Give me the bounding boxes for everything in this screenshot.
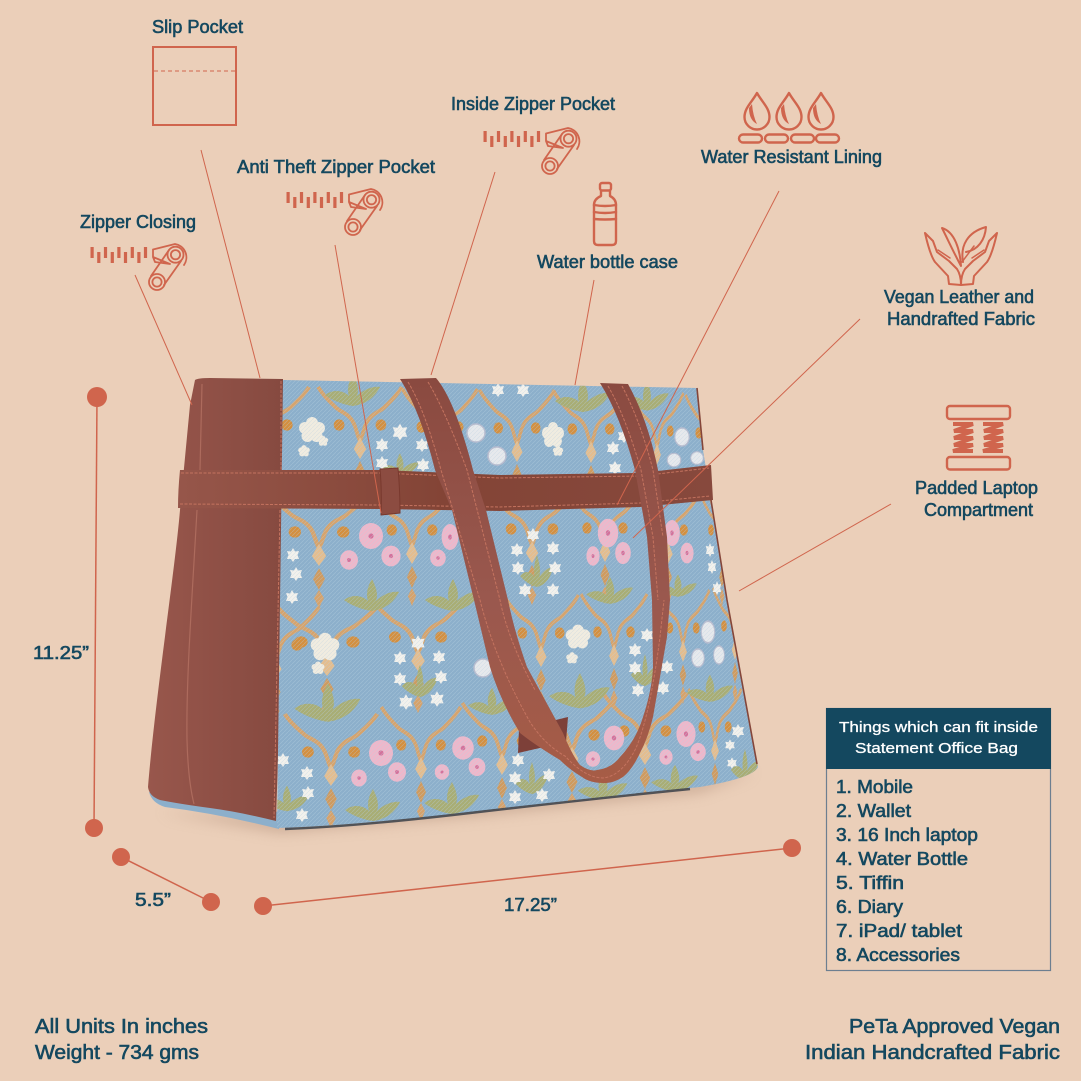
panel header: [826, 708, 1051, 769]
list of items: 2. Wallet: [836, 801, 911, 821]
panel heading: [839, 719, 1038, 757]
label: Padded Laptop Compartment: Compartment: [924, 500, 1033, 520]
belt loop: [380, 468, 400, 515]
pink flowers: [340, 519, 706, 786]
icon: water bottle: [594, 183, 616, 245]
arch rows: [221, 387, 757, 828]
label: Zipper Closing: Zipper Closing: [80, 212, 196, 232]
list of items: 5. Tiffin: [836, 873, 904, 893]
strap stitching: [408, 382, 664, 778]
footer: certification: PeTa Approved Vegan: [849, 1016, 1060, 1038]
footer: certification: Indian Handcrafted Fabric: [805, 1042, 1060, 1064]
icon: slip pocket: [153, 47, 236, 125]
shoulder strap: [400, 378, 670, 783]
product photo: tote bag: [148, 370, 770, 840]
footer: units and weight: Weight - 734 gms: [35, 1042, 199, 1064]
footer: units and weight: [35, 1016, 208, 1064]
label: Padded Laptop Compartment: [915, 478, 1038, 520]
white star flowers: [277, 383, 744, 822]
icon: inside zipper: [484, 128, 579, 174]
list of items: 7. iPad/ tablet: [836, 921, 962, 941]
label: Anti Theft Zipper Pocket: Anti Theft Zipper Pocket: [237, 157, 435, 177]
dimension label: width: 17.25”: [504, 895, 557, 915]
olive leaves: [265, 374, 758, 821]
leader lines: [135, 150, 891, 591]
label: Water bottle case: Water bottle case: [537, 252, 678, 272]
grey ring flowers: [467, 424, 724, 677]
label: Inside Zipper Pocket: Inside Zipper Pocket: [451, 94, 615, 114]
panel: things which fit inside: [826, 708, 1051, 970]
icon: anti theft zipper: [286, 189, 382, 235]
label: Vegan Leather and Handcrafted Fabric: Handrafted Fabric: [887, 309, 1035, 329]
label: Padded Laptop Compartment: Padded Laptop: [915, 478, 1038, 498]
twill texture: [270, 370, 770, 840]
label: Slip Pocket: Slip Pocket: [152, 17, 243, 37]
fabric front panel: [277, 380, 758, 828]
dimension label: depth: 5.5”: [135, 890, 171, 910]
dimension: depth: [112, 848, 220, 911]
label: Vegan Leather and Handcrafted Fabric: [884, 287, 1035, 329]
icon: water drops: [739, 93, 839, 142]
right edge trim: [697, 388, 757, 764]
bottom edge shadow: [285, 789, 690, 829]
leather patch: [518, 717, 568, 753]
side leather panel: [148, 378, 283, 821]
list of items: 1. Mobile: [836, 777, 913, 797]
dimension label: height: 11.25”: [33, 643, 89, 663]
footer: units and weight: All Units In inches: [35, 1016, 208, 1038]
floor shadow: [160, 772, 755, 832]
label: Vegan Leather and Handcrafted Fabric: Vegan Leather and: [884, 287, 1034, 307]
list of items: [836, 777, 978, 965]
bottom fabric trim of side panel: [149, 792, 279, 829]
horizontal leather belt: [178, 465, 713, 511]
panel heading: Things which can fit inside: [839, 719, 1038, 736]
panel heading: Statement Office Bag: [855, 740, 1018, 757]
list of items: 3. 16 Inch laptop: [836, 825, 978, 845]
fabric floral pattern: [221, 370, 770, 840]
side panel seams: [187, 384, 202, 804]
label: Water Resistant Lining: Water Resistant Lining: [701, 147, 882, 167]
belt stitching: [180, 468, 710, 507]
icon: padded spring: [947, 406, 1010, 470]
dimension: width: [254, 839, 801, 915]
list of items: 8. Accessories: [836, 945, 960, 965]
list of items: 4. Water Bottle: [836, 849, 968, 869]
icon: zipper closing: [90, 244, 186, 290]
footer: certification: [805, 1016, 1060, 1064]
fabric-leather stitching: [274, 381, 281, 818]
dimension: height: [85, 387, 107, 837]
cream flowers: [298, 417, 590, 674]
list of items: 6. Diary: [836, 897, 903, 917]
icon: hands with leaves: [925, 227, 997, 285]
